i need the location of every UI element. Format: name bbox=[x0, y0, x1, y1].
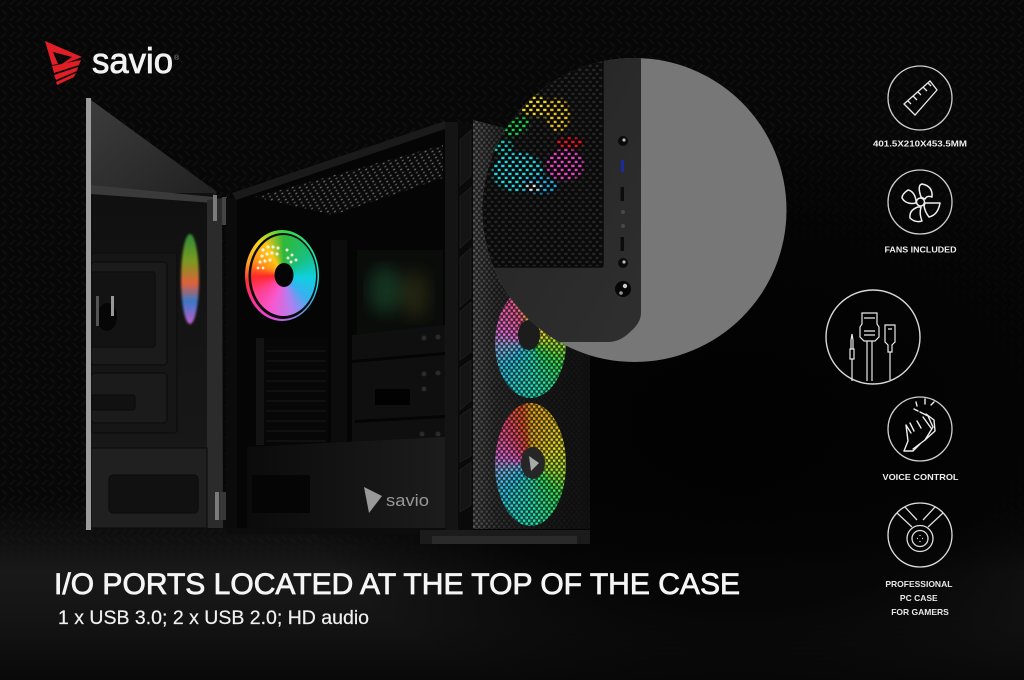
icon: medal bbox=[888, 503, 952, 567]
front pillar bbox=[445, 122, 458, 530]
rear wall reflection bbox=[357, 250, 443, 334]
base plate bbox=[226, 528, 590, 544]
dark panel bbox=[470, 50, 641, 342]
faint rainbow glow bbox=[369, 266, 429, 319]
logo: Savio bbox=[45, 40, 180, 85]
subheading: port list: 1 x USB 3.0; 2 x USB 2.0; HD audio bbox=[58, 607, 369, 629]
top mesh panel bbox=[255, 145, 443, 215]
feature: voice control bbox=[882, 397, 958, 482]
door left bright edge bbox=[86, 98, 91, 530]
magnifier grey disc bbox=[482, 58, 786, 362]
icon: clapping hands bbox=[888, 397, 952, 461]
door interior reflection bbox=[91, 193, 213, 528]
label: FOR GAMERS bbox=[891, 607, 949, 617]
shroud logo: savio bbox=[386, 491, 429, 510]
icon: cables bbox=[826, 290, 920, 384]
HDMI plug bbox=[860, 313, 879, 381]
label: FANS INCLUDED bbox=[884, 244, 956, 254]
feature: professional case bbox=[885, 503, 955, 617]
label: PROFESSIONAL bbox=[885, 579, 952, 589]
black knob bbox=[96, 296, 117, 331]
ports column bbox=[615, 136, 631, 297]
door hinges bbox=[213, 195, 228, 520]
heading: I/O PORTS LOCATED AT THE TOP OF THE CASE bbox=[54, 568, 740, 601]
PSU shroud bbox=[247, 437, 445, 530]
lower fan hub bbox=[521, 447, 545, 479]
fan dark ring bbox=[248, 233, 318, 319]
label: VOICE CONTROL bbox=[882, 472, 958, 482]
fan: upper front bbox=[495, 288, 566, 398]
mesh overlay in magnifier bbox=[482, 62, 602, 266]
wordmark: savio bbox=[92, 40, 173, 81]
front panel base bbox=[473, 120, 590, 529]
mesh backing bbox=[482, 62, 602, 266]
expansion slots bbox=[256, 338, 328, 445]
fan: lower front bbox=[495, 403, 566, 526]
case interior bbox=[233, 125, 445, 530]
vertical rail bbox=[331, 240, 347, 445]
door horizontal bar bbox=[91, 185, 213, 203]
shroud logo bbox=[364, 487, 429, 513]
mesh border bbox=[494, 61, 604, 268]
registered mark: ® bbox=[174, 54, 180, 62]
fan blades bbox=[251, 235, 316, 316]
USB plug bbox=[885, 325, 895, 380]
fan seen through mesh bbox=[492, 89, 584, 194]
icon: ruler bbox=[888, 66, 952, 130]
fan: RGB cooler bbox=[245, 230, 319, 321]
mesh overlay bbox=[473, 120, 590, 529]
upper fan hub bbox=[518, 320, 540, 350]
door upper triangle bbox=[91, 100, 217, 198]
icon: red arrow mark bbox=[45, 41, 82, 85]
feature: fans bbox=[884, 170, 956, 254]
case body bbox=[226, 121, 590, 544]
left pillar bbox=[226, 198, 237, 528]
label: 401.5X210X453.5MM bbox=[873, 138, 967, 148]
side vents strip bbox=[458, 124, 473, 530]
fan hole dots bbox=[257, 245, 298, 269]
shroud cutout bbox=[252, 475, 310, 513]
feature: dimensions bbox=[873, 66, 967, 148]
label: PC CASE bbox=[900, 593, 938, 603]
door right frame bbox=[207, 198, 223, 528]
audio jack bbox=[850, 334, 854, 381]
reflected fan bbox=[181, 234, 199, 324]
front panel mesh with fans bbox=[473, 120, 590, 529]
door: open glass side panel bbox=[86, 98, 228, 530]
icon: fan bbox=[888, 170, 952, 234]
drive cage bbox=[352, 325, 445, 445]
top frame bbox=[232, 121, 445, 200]
fan hub bbox=[274, 263, 294, 287]
fan rim bbox=[245, 230, 319, 321]
reflected panels bbox=[91, 253, 207, 528]
magnifier: top I/O detail bbox=[470, 50, 786, 362]
